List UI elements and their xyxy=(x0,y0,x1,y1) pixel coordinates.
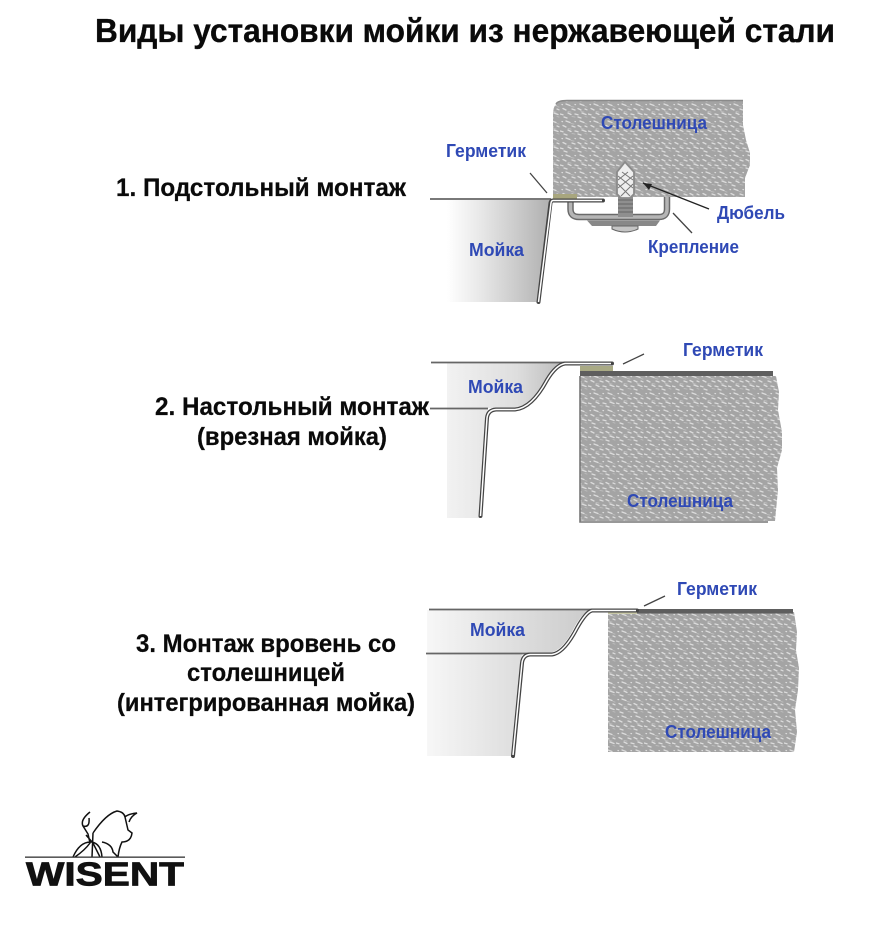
diagram 2: top mount installation xyxy=(430,340,782,522)
label: sink 2: Мойка xyxy=(468,377,524,397)
sink edge 1 xyxy=(430,198,551,200)
sealant 1 xyxy=(553,194,577,198)
sealant 2 xyxy=(580,366,613,371)
logo line xyxy=(25,856,185,858)
countertop top strip 3 xyxy=(637,609,793,614)
heading: 3. flush mount: столешницей xyxy=(187,659,345,687)
arrow head: dowel xyxy=(643,183,652,190)
logo: WISENT xyxy=(25,811,185,892)
label: sink 1: Мойка xyxy=(469,240,525,260)
label: dowel: Дюбель xyxy=(717,203,785,223)
logo wordmark: WISENT xyxy=(26,856,184,892)
label: sealant 2: Герметик xyxy=(683,340,764,360)
sink rim lines 3 xyxy=(426,610,592,654)
sealant 3 xyxy=(608,611,637,614)
label: countertop 2: Столешница xyxy=(627,491,734,511)
label: countertop 3: Столешница xyxy=(665,722,772,742)
sink body 3 xyxy=(427,610,590,756)
icon: bison xyxy=(73,811,137,857)
countertop 2 xyxy=(580,376,782,521)
countertop top edge 1 xyxy=(556,100,743,104)
title: Виды установки мойки из нержавеющей стали xyxy=(95,12,835,49)
countertop top strip 2 xyxy=(580,371,773,376)
bracket xyxy=(570,197,667,232)
arrow: dowel xyxy=(643,183,709,209)
countertop 3 xyxy=(608,612,799,752)
heading: 3. flush mount: 3. Монтаж вровень со xyxy=(136,630,396,658)
label: sink 3: Мойка xyxy=(470,620,526,640)
diagram 3: flush mount installation xyxy=(426,579,799,756)
label: sealant 3: Герметик xyxy=(677,579,758,599)
heading: 2. top mount: (врезная мойка) xyxy=(197,423,387,451)
heading: 3. flush mount: (интегрированная мойка) xyxy=(117,689,415,717)
anchor dowel xyxy=(617,162,634,217)
heading: 2. top mount: 2. Настольный монтаж xyxy=(155,393,429,421)
label: sealant 1: Герметик xyxy=(446,141,527,161)
diagram 1: undermount installation xyxy=(430,100,785,302)
arrow: sealant 1 xyxy=(530,173,547,193)
sink body 2 xyxy=(447,363,563,518)
label: bracket text: Крепление xyxy=(648,237,739,257)
heading: 1. undermount: 1. Подстольный монтаж xyxy=(116,174,406,202)
sink body 1 xyxy=(447,200,550,302)
arrow: sealant 2 xyxy=(623,354,644,364)
countertop edges 2 xyxy=(580,376,768,522)
countertop 1 xyxy=(553,100,750,197)
sink edge 2 xyxy=(480,364,612,516)
sink rim lines 2 xyxy=(430,362,565,408)
heading: 3. flush mount xyxy=(117,630,415,717)
arrow: sealant 3 xyxy=(644,596,665,606)
label: countertop 1: Столешница xyxy=(601,113,708,133)
arrow: bracket xyxy=(673,213,692,233)
sink edge 3 xyxy=(513,610,637,756)
heading: 2. top mount xyxy=(155,393,429,451)
